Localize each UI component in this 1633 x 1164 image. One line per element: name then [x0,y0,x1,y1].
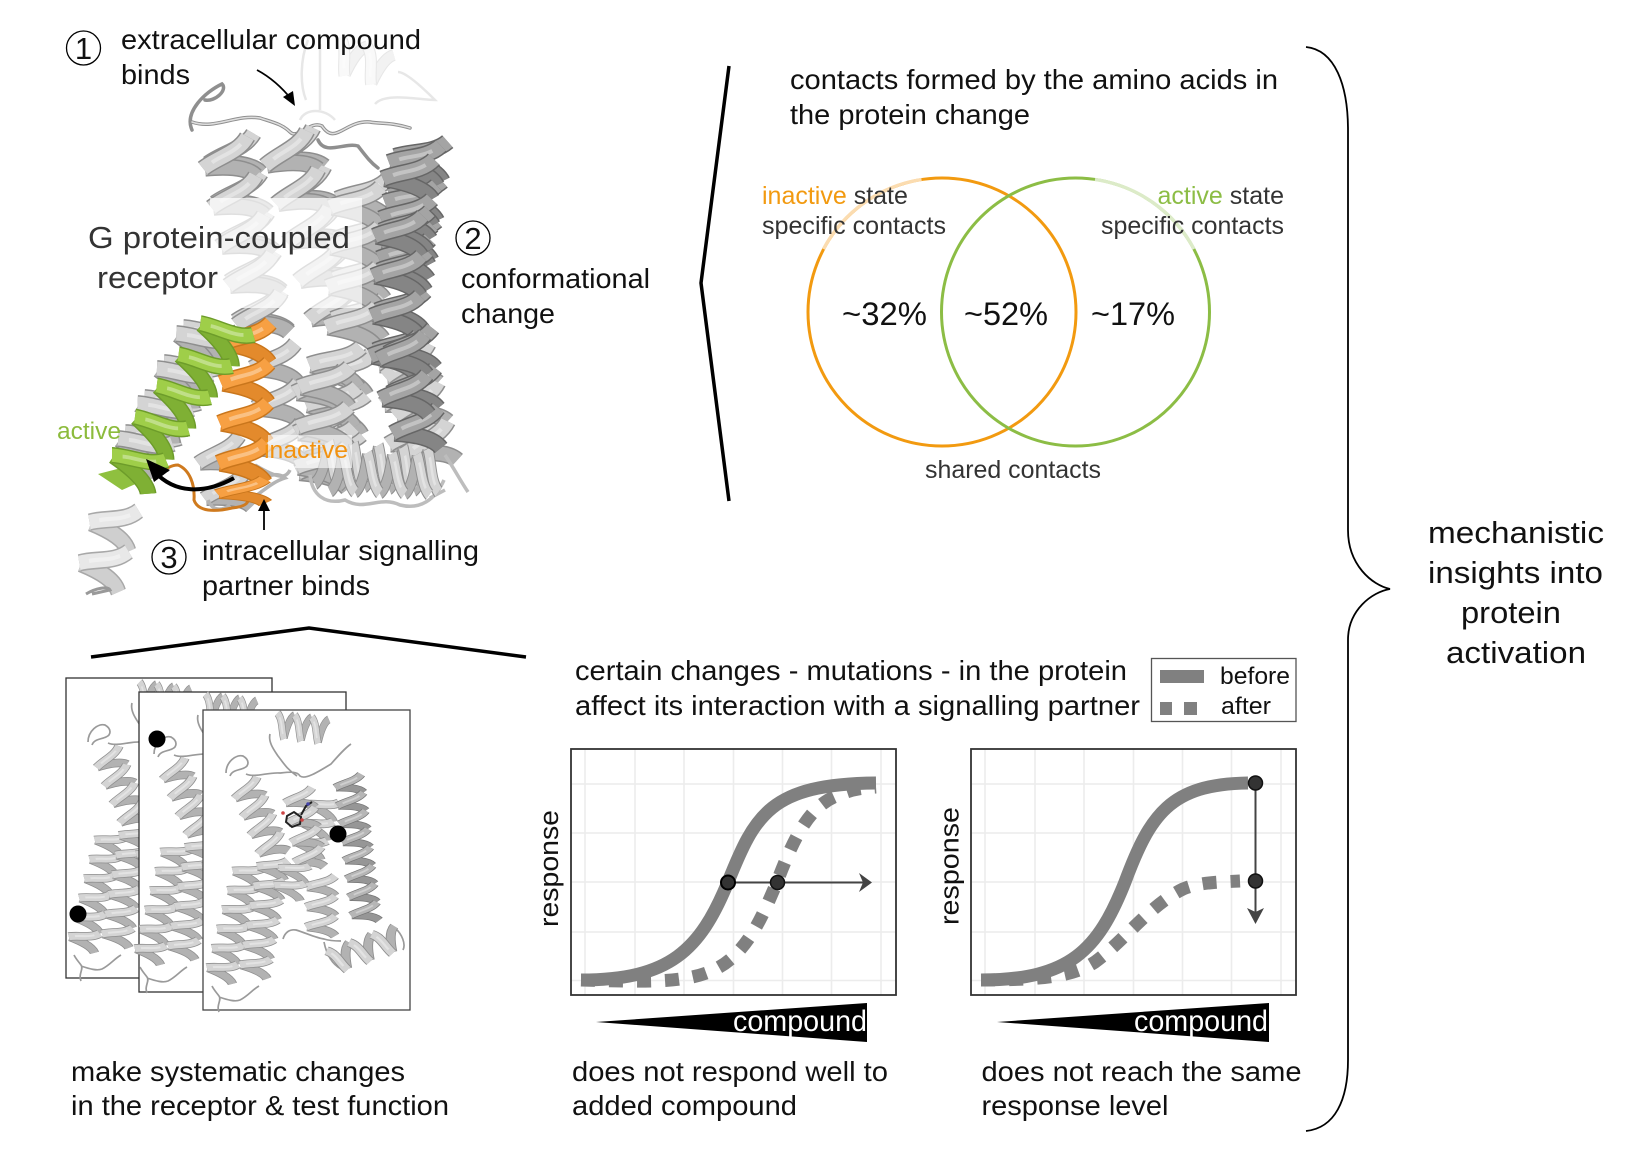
heading: mutations: affect its interaction with a signalling partner [575,690,1140,721]
label: active state specific contacts: specific contacts [1101,212,1284,240]
right brace [1306,47,1390,1131]
fade over N-terminal helix [285,20,445,125]
green active helix [98,306,253,494]
horizontal shift arrow with points [721,873,872,892]
step 2: conformational change: change [461,298,555,329]
caption: chart 1 [572,1056,888,1121]
curve: after (dashed) [581,787,876,981]
heading: mutations: certain changes - mutations - in the protein [575,655,1127,686]
conclusion text: protein [1461,595,1561,630]
circle: inactive state [808,178,1076,446]
value: 52 percent: ~52% [964,296,1048,332]
stacked mutation cards [66,678,410,1012]
extracellular N-terminal helix [300,38,435,120]
dark helix [370,135,448,451]
y axis label: response [534,810,564,927]
up arrow to intracellular site [258,499,270,530]
conclusion text: mechanistic [1428,515,1604,550]
receptor title [88,220,350,295]
card 3 [203,710,410,1012]
lower transmembrane helices [109,308,457,515]
caption: systematic changes: make systematic changes [71,1056,405,1087]
step 3: intracellular signalling partner binds [152,535,479,601]
receptor title: G protein-coupled [88,220,350,255]
heading: mutations [575,655,1140,721]
step 1: extracellular compound binds: extracellular compound [121,24,421,55]
fading central band [210,198,362,308]
curve: before (solid) [581,783,876,980]
legend [1152,658,1296,722]
curve: after (dashed) [981,881,1240,980]
label: shared contacts: shared contacts [925,456,1101,484]
chevron pointing to contacts panel [701,66,729,501]
step 3: intracellular signalling partner binds: 3 [160,540,178,575]
compound wedge 2 [997,1003,1269,1042]
label: inactive state specific contacts: specific contacts [762,212,946,240]
caption: chart 2 [982,1056,1302,1121]
label: inactive: inactive [264,437,348,464]
arrow to binding site [257,70,295,106]
chevron pointing to mutation panel [91,628,526,657]
curved movement arrow [146,459,234,489]
chart: shifted response curve [534,749,896,995]
compound wedge 1 [596,1003,867,1042]
intracellular helix bundle [310,441,468,506]
panel: G protein-coupled receptor structure [57,20,468,594]
caption: chart 2: response level [982,1090,1168,1121]
orange inactive helix [161,321,271,510]
caption: systematic changes: in the receptor & test function [71,1090,449,1121]
label: active state specific contacts: active state [1158,182,1284,210]
card 1 [66,678,272,981]
label: inactive state specific contacts [762,182,946,240]
step 1: extracellular compound binds: 1 [75,31,92,66]
label: active state specific contacts [1101,182,1284,240]
compound wedge 2: compound [1134,1005,1268,1038]
step 3: intracellular signalling partner binds: intracellular signalling [202,535,479,566]
conclusion text: insights into [1428,555,1603,590]
heading: contacts: contacts formed by the amino acids in [790,64,1278,95]
chart: reduced response curve [934,749,1296,995]
legend: after [1221,693,1271,720]
caption: chart 1: added compound [572,1090,797,1121]
value: 32 percent: ~32% [842,296,927,332]
label: active: active [57,418,121,445]
caption: chart 1: does not respond well to [572,1056,888,1087]
heading: contacts: the protein change [790,99,1030,130]
circle: active state [942,178,1210,446]
card 2 [132,692,346,993]
cytoplasmic tail helix [75,500,139,594]
curve: before (solid) [981,783,1248,980]
step 3: intracellular signalling partner binds: partner binds [202,570,370,601]
upper transmembrane helices [199,128,388,347]
label: inactive state specific contacts: inactive state [762,182,908,210]
heading: contacts [790,64,1278,130]
step 1: extracellular compound binds [66,24,421,90]
caption: systematic changes [71,1056,449,1121]
compound wedge 1: compound [733,1005,867,1038]
step 2: conformational change [456,221,650,329]
value: 17 percent: ~17% [1091,296,1175,332]
caption: chart 2: does not reach the same [982,1056,1302,1087]
extracellular loops [190,84,410,168]
conclusion text: activation [1446,635,1586,670]
legend: before [1220,663,1290,690]
step 2: conformational change: 2 [464,221,482,256]
step 2: conformational change: conformational [461,263,650,294]
vertical drop arrow with points [1247,776,1264,924]
venn diagram [762,178,1284,484]
step 1: extracellular compound binds: binds [121,59,190,90]
y axis label: response [934,807,964,925]
conclusion text [1428,515,1604,670]
receptor title: receptor [97,260,218,295]
